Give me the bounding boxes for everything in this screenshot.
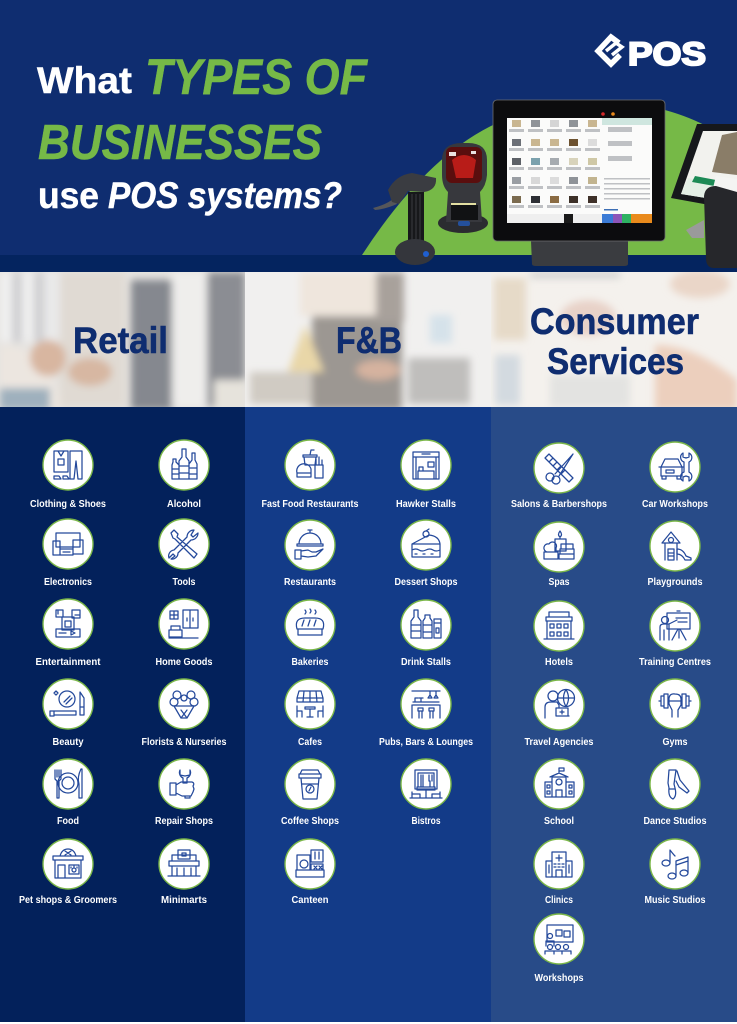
item: dance studios: Dance Studios — [644, 816, 707, 827]
item: travel agencies — [524, 680, 594, 748]
item: canteen: Canteen — [292, 895, 328, 906]
item: pubs, bars and lounges: Pubs, Bars & Lounges — [379, 737, 473, 748]
item: electronics: Electronics — [44, 577, 92, 588]
title: TYPES OF — [145, 49, 368, 105]
item: dance studios — [644, 759, 707, 827]
item: alcohol — [159, 440, 209, 510]
item: entertainment: Entertainment — [36, 657, 101, 668]
item: beauty — [43, 679, 93, 748]
photo panel: F&B — [245, 272, 491, 410]
title: What — [37, 60, 132, 101]
item: salons and barbershops — [511, 443, 607, 510]
item: salons and barbershops: Salons & Barbershops — [511, 499, 607, 510]
item: tools — [159, 519, 209, 588]
green hill — [362, 102, 737, 255]
item: coffee shops: Coffee Shops — [281, 816, 339, 827]
item: hawker stalls: Hawker Stalls — [396, 499, 456, 510]
item: travel agencies: Travel Agencies — [524, 737, 594, 748]
item: bakeries: Bakeries — [292, 657, 329, 668]
item: tools: Tools — [172, 577, 196, 588]
item: spas: Spas — [548, 577, 570, 588]
item: car workshops: Car Workshops — [642, 499, 708, 510]
item: hotels: Hotels — [545, 657, 573, 668]
photo panel: retail — [0, 272, 245, 410]
item: electronics — [43, 519, 93, 588]
item: clinics — [534, 839, 584, 906]
item: playgrounds: Playgrounds — [648, 577, 703, 588]
title — [37, 49, 368, 216]
title: BUSINESSES — [38, 116, 322, 170]
item: clinics: Clinics — [545, 895, 573, 906]
item: fast food restaurants: Fast Food Restaurants — [262, 499, 359, 510]
item: clothing and shoes: Clothing & Shoes — [30, 499, 106, 510]
item: beauty: Beauty — [52, 737, 84, 748]
screen — [507, 112, 652, 223]
item: drink stalls: Drink Stalls — [401, 657, 451, 668]
item: school — [534, 759, 584, 827]
panel: food and beverage — [245, 407, 491, 1022]
item: car workshops — [642, 442, 708, 510]
heading: F&B: F&B — [336, 320, 402, 361]
item: gyms: Gyms — [662, 737, 688, 748]
item: bistros: Bistros — [412, 816, 441, 827]
item: spas — [534, 522, 584, 588]
item: cafes — [285, 679, 335, 748]
logo: ePOS — [598, 36, 706, 72]
item: pubs, bars and lounges — [379, 679, 473, 748]
item: fast food restaurants — [262, 440, 359, 510]
item: hawker stalls — [396, 440, 456, 510]
item: minimarts: Minimarts — [161, 895, 207, 906]
item: canteen — [285, 839, 335, 906]
item: home goods — [156, 599, 213, 668]
heading: Consumer Services: Consumer — [530, 301, 699, 342]
item: alcohol: Alcohol — [167, 499, 201, 510]
heading: Consumer Services: Services — [547, 341, 684, 382]
item: dessert shops — [394, 520, 458, 588]
item: playgrounds — [648, 521, 703, 588]
heading: Retail: Retail — [73, 320, 168, 361]
item: school: School — [544, 816, 574, 827]
item: pet shops and groomers: Pet shops & Groomers — [19, 895, 117, 906]
item: food: Food — [57, 816, 79, 827]
handheld barcode scanner — [373, 173, 436, 265]
item: entertainment — [36, 599, 101, 668]
item: drink stalls — [401, 600, 451, 668]
item: pet shops and groomers — [19, 839, 117, 906]
item: dessert shops: Dessert Shops — [394, 577, 458, 588]
title: use — [38, 175, 99, 216]
panel: consumer services — [491, 407, 737, 1022]
item: home goods: Home Goods — [156, 657, 213, 668]
item: hotels — [534, 601, 584, 668]
item: coffee shops — [281, 759, 339, 827]
item: food — [43, 759, 93, 827]
receipt printer — [704, 176, 737, 268]
item: workshops — [534, 914, 584, 984]
item: training centres: Training Centres — [639, 657, 711, 668]
item: florists and nurseries: Florists & Nurseries — [142, 737, 227, 748]
item: music studios — [644, 839, 706, 906]
header banner — [0, 0, 737, 272]
item: restaurants — [284, 520, 336, 588]
item: repair shops — [155, 759, 213, 827]
item: gyms — [650, 679, 700, 748]
omnidirectional scanner — [438, 143, 488, 233]
item: training centres — [639, 601, 711, 668]
item: bakeries — [285, 600, 335, 668]
item: bistros — [401, 759, 451, 827]
POS monitor — [493, 100, 665, 266]
tablet POS terminal — [671, 124, 737, 238]
item: repair shops: Repair Shops — [155, 816, 213, 827]
logo: ePOS: POS — [628, 36, 706, 72]
title: POS systems? — [108, 175, 342, 216]
item: clothing and shoes — [30, 440, 106, 510]
item: minimarts — [159, 839, 209, 906]
item: florists and nurseries — [142, 679, 227, 748]
item: workshops: Workshops — [534, 973, 584, 984]
item: restaurants: Restaurants — [284, 577, 336, 588]
photo panel: consumer services — [491, 270, 737, 410]
item: music studios: Music Studios — [644, 895, 706, 906]
panel: retail — [0, 407, 245, 1022]
heading: Consumer Services — [530, 301, 699, 382]
item: cafes: Cafes — [298, 737, 322, 748]
